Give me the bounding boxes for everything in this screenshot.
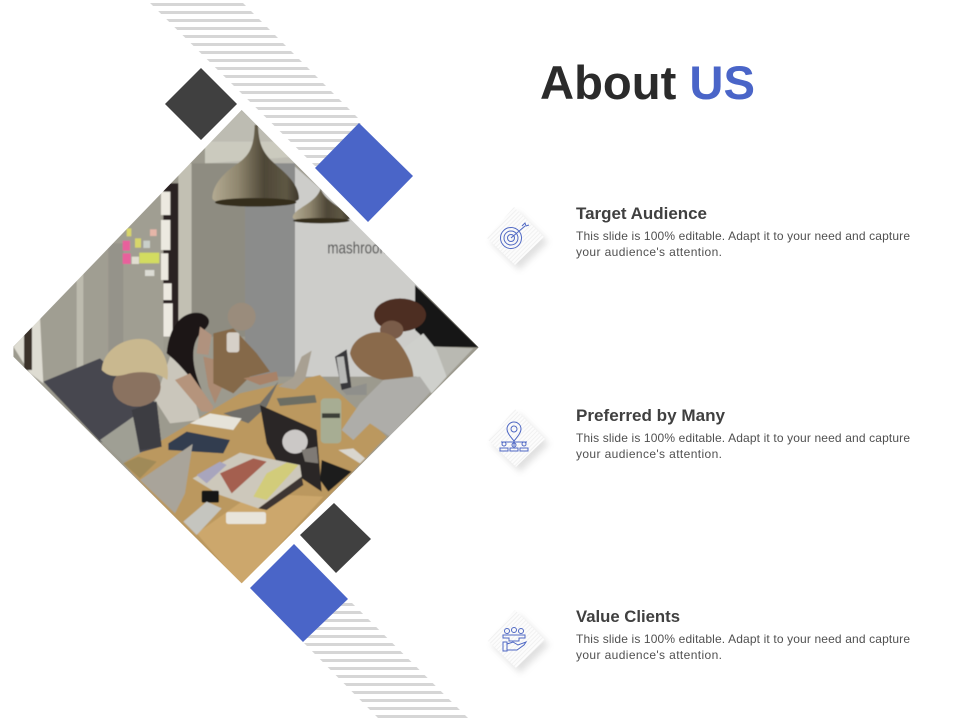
title: About US [540,56,755,109]
photo: team meeting around a table, diamond crop [0,100,490,590]
dark diamond: top [165,68,237,140]
heading: Value Clients [576,607,680,626]
item: preferred by many [488,406,910,472]
heading: Target Audience [576,204,707,223]
blue diamond: top [315,123,413,222]
icon: people held on an open hand [488,610,549,673]
description: This slide is 100% editable. Adapt it to your need and capture [576,431,910,445]
striped band: top [147,0,362,167]
description: This slide is 100% editable. Adapt it to your need and capture [576,229,910,243]
description: your audience's attention. [576,648,722,662]
description: your audience's attention. [576,447,722,461]
item: target audience [487,204,910,270]
dark diamond: bottom [300,503,371,573]
description: your audience's attention. [576,245,722,259]
icon: location pin and network of people [488,409,549,472]
description: This slide is 100% editable. Adapt it to your need and capture [576,632,910,646]
photo: team meeting around a table, diamond crop: mashroom [327,238,391,257]
blue diamond: bottom [250,544,348,642]
item: value clients [488,607,910,673]
striped band: bottom [303,599,468,718]
heading: Preferred by Many [576,406,726,425]
icon: target with arrow [487,207,548,270]
